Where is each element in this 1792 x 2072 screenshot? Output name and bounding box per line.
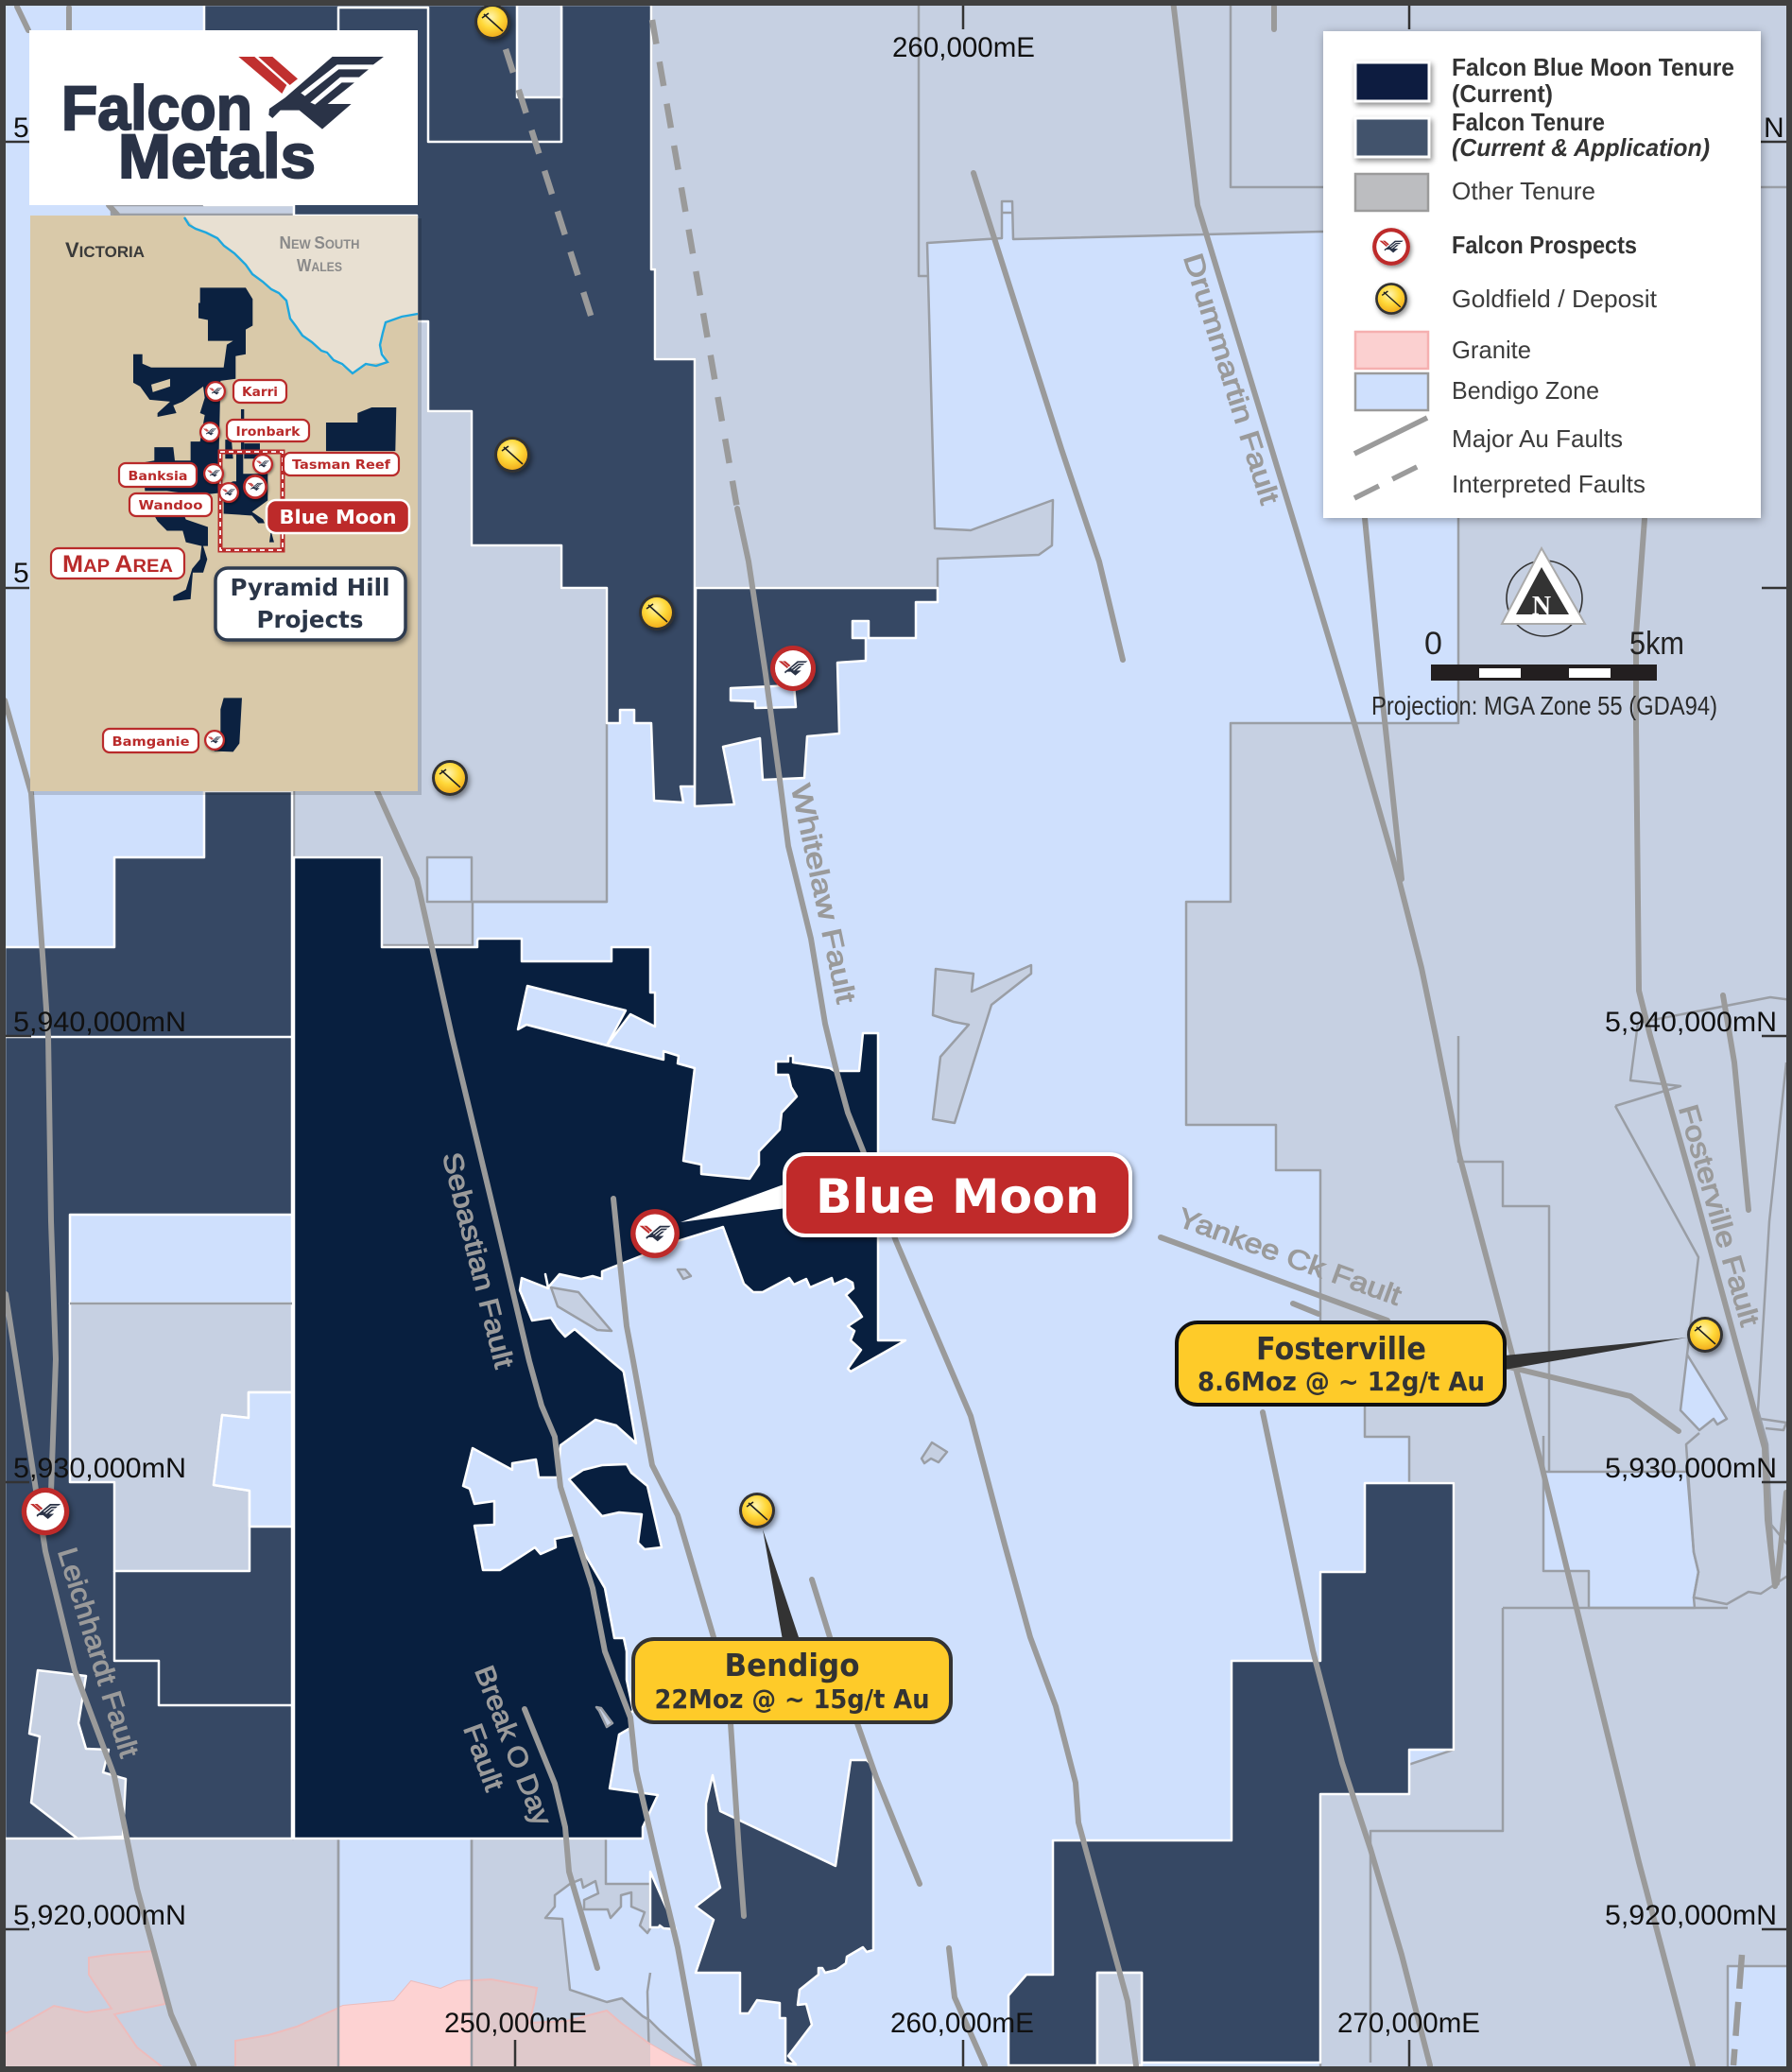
legend item: Bendigo Zone bbox=[1355, 373, 1599, 410]
callout: Blue Moon: Blue Moon bbox=[816, 1169, 1099, 1224]
inset: New South Wales label: WALES bbox=[297, 256, 345, 275]
projection note: Projection: MGA Zone 55 (GDA94) bbox=[1371, 691, 1717, 720]
inset label: Wandoo bbox=[129, 493, 212, 516]
grid coordinate labels: 5,940,000mN bbox=[13, 1007, 186, 1038]
legend item: Interpreted Faults bbox=[1354, 465, 1646, 498]
fault labels: Sebastian Fault bbox=[436, 1149, 519, 1372]
callout: Fosterville: 8.6Moz @ ~ 12g/t Au bbox=[1198, 1366, 1485, 1397]
grid coordinate labels: 270,000mE bbox=[1337, 2008, 1480, 2039]
Falcon prospect markers bbox=[22, 646, 816, 1535]
grid coordinate labels: 5,930,000mN bbox=[1605, 1453, 1777, 1484]
grid coordinate labels: N bbox=[1764, 112, 1784, 144]
fault labels bbox=[51, 250, 1765, 1830]
scale bar bbox=[1424, 626, 1684, 681]
logo wordmark: Metals: Metals bbox=[118, 121, 316, 191]
legend item: Goldfield / Deposit bbox=[1375, 283, 1658, 315]
legend item: Goldfield / Deposit: Goldfield / Deposit bbox=[1452, 285, 1658, 313]
legend item: Falcon Prospects: Falcon Prospects bbox=[1452, 231, 1637, 259]
grid coordinate labels: 5,920,000mN bbox=[1605, 1900, 1777, 1931]
grid coordinate labels: 5 bbox=[13, 558, 29, 589]
callout: Bendigo: Bendigo bbox=[724, 1647, 860, 1684]
grid coordinate labels: 5,920,000mN bbox=[13, 1900, 186, 1931]
legend item: Falcon Tenure: Falcon Tenure bbox=[1452, 108, 1605, 136]
inset label: Banksia bbox=[119, 463, 197, 487]
inset label: Ironbark: Ironbark bbox=[236, 425, 301, 440]
granite bbox=[5, 1839, 697, 2067]
legend item: Granite bbox=[1355, 332, 1531, 369]
north arrow bbox=[1502, 548, 1585, 636]
fault labels: Break O Day bbox=[468, 1662, 557, 1830]
goldfield markers bbox=[432, 4, 675, 796]
inset label: Banksia: Banksia bbox=[129, 470, 187, 484]
grid coordinate labels: 5 bbox=[13, 112, 29, 144]
inset label: Pyramid Hill Projects: Projects bbox=[257, 606, 363, 633]
callout: Bendigo: 22Moz @ ~ 15g/t Au bbox=[654, 1684, 930, 1715]
inset label: Ironbark bbox=[227, 420, 309, 441]
inset label: Tasman Reef bbox=[284, 453, 399, 475]
inset label: Bamganie bbox=[103, 729, 198, 752]
inset: tenement shapes bbox=[133, 287, 396, 751]
inset label: Bamganie: Bamganie bbox=[112, 735, 190, 750]
scale bar: 0 bbox=[1424, 626, 1442, 662]
inset label: Blue Moon bbox=[267, 500, 409, 533]
callout: Bendigo bbox=[633, 1493, 951, 1722]
north arrow: N bbox=[1532, 592, 1551, 621]
legend item: Falcon Blue Moon Tenure: (Current) bbox=[1452, 79, 1553, 108]
fault labels: Whitelaw Fault bbox=[784, 782, 861, 1006]
inset label: Pyramid Hill Projects: Pyramid Hill bbox=[231, 574, 389, 601]
inset label: Karri bbox=[233, 380, 286, 403]
legend item: Falcon Blue Moon Tenure: Falcon Blue Moon Tenure bbox=[1452, 53, 1734, 81]
logo: falcon bird bbox=[238, 57, 384, 130]
legend item: Falcon Tenure bbox=[1355, 108, 1710, 162]
inset label: Map Area: MAP AREA bbox=[62, 551, 173, 578]
legend bbox=[1323, 31, 1761, 518]
Falcon Blue Moon tenure bbox=[294, 857, 905, 1839]
fault labels: Yankee Ck Fault bbox=[1174, 1203, 1405, 1312]
fault labels: Leichhardt Fault bbox=[51, 1545, 144, 1761]
fault labels: Drummartin Fault bbox=[1177, 250, 1284, 508]
callout: Blue Moon bbox=[630, 1154, 1130, 1258]
inset label: Karri: Karri bbox=[242, 386, 278, 400]
inset label: Tasman Reef: Tasman Reef bbox=[292, 458, 390, 473]
legend item: Major Au Faults: Major Au Faults bbox=[1452, 424, 1623, 453]
legend item: Falcon Prospects bbox=[1372, 228, 1637, 266]
inset label: Pyramid Hill Projects bbox=[215, 568, 405, 640]
legend item: Interpreted Faults: Interpreted Faults bbox=[1452, 470, 1646, 498]
inset: state border river bbox=[184, 217, 418, 373]
inset: map area dashed frame bbox=[220, 452, 283, 550]
grid coordinate labels: 5,930,000mN bbox=[13, 1453, 186, 1484]
inset: prospect markers bbox=[199, 381, 273, 751]
inset: Victoria label: VICTORIA bbox=[65, 238, 145, 262]
grid coordinate labels: 5,940,000mN bbox=[1605, 1007, 1777, 1038]
grid coordinate labels: 250,000mE bbox=[444, 2008, 587, 2039]
grid coordinate labels: 260,000mE bbox=[892, 32, 1035, 63]
legend item: Falcon Tenure: (Current & Application) bbox=[1452, 133, 1710, 162]
callout: Fosterville bbox=[1177, 1317, 1723, 1405]
legend item: Other Tenure: Other Tenure bbox=[1452, 177, 1595, 205]
scale bar: 5km bbox=[1629, 626, 1684, 662]
fault labels: Fault bbox=[457, 1719, 508, 1795]
legend item: Falcon Blue Moon Tenure bbox=[1355, 53, 1734, 108]
fault labels: Fosterville Fault bbox=[1672, 1101, 1765, 1330]
inset: New South Wales label: NEW SOUTH bbox=[280, 233, 361, 252]
logo wordmark: Falcon: Falcon bbox=[61, 73, 252, 143]
legend item: Bendigo Zone: Bendigo Zone bbox=[1452, 376, 1599, 405]
inset label: Wandoo: Wandoo bbox=[138, 499, 203, 513]
legend item: Granite: Granite bbox=[1452, 336, 1531, 364]
grid coordinate labels: 260,000mE bbox=[890, 2008, 1034, 2039]
logo panel bbox=[29, 30, 418, 205]
location inset map bbox=[30, 216, 422, 795]
inset: New South Wales area bbox=[184, 216, 418, 373]
callout: Fosterville: Fosterville bbox=[1256, 1330, 1426, 1367]
legend item: Major Au Faults bbox=[1354, 418, 1623, 454]
legend item: Other Tenure bbox=[1355, 174, 1595, 211]
inset label: Blue Moon: Blue Moon bbox=[280, 506, 397, 528]
